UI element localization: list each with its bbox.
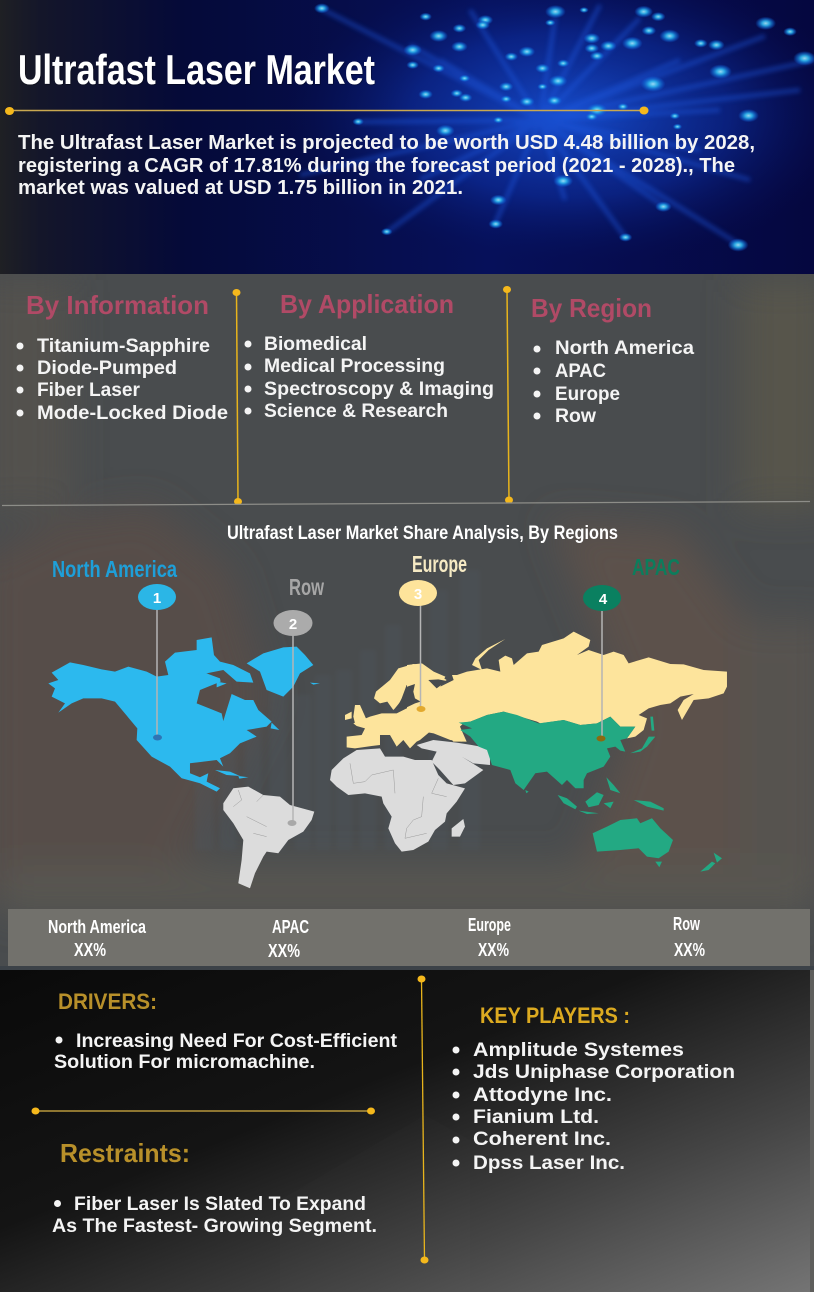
list: regions: Europe <box>555 383 620 405</box>
panel: by application <box>244 289 494 422</box>
share: europe <box>468 915 511 960</box>
list: key players: Jds Uniphase Corporation <box>473 1062 735 1083</box>
pin: row <box>274 574 324 826</box>
map: asia pacific <box>459 712 722 872</box>
pin: apac: APAC <box>632 554 680 580</box>
title: Ultrafast Laser Market <box>18 46 375 93</box>
list: key players: Dpss Laser Inc. <box>473 1153 625 1174</box>
pin: row: 2 <box>289 616 297 633</box>
heading: by application: By Application <box>280 289 454 319</box>
share: row <box>673 914 705 960</box>
pin: north america: 1 <box>153 590 161 607</box>
list: applications <box>244 333 494 422</box>
laser fibres <box>300 5 814 245</box>
list: applications: Science & Research <box>264 400 448 422</box>
heading: drivers: DRIVERS: <box>58 989 157 1014</box>
pin: apac <box>583 554 680 742</box>
heading: by information: By Information <box>26 290 209 320</box>
list: regions <box>534 337 694 427</box>
list: key players <box>452 1040 735 1174</box>
panel: by information <box>16 290 228 424</box>
pin: row: Row <box>289 574 324 600</box>
heading: key players: KEY PLAYERS : <box>480 1003 630 1028</box>
list: regions: North America <box>555 337 694 359</box>
panel: header laser background <box>0 0 814 274</box>
text: driver detail <box>54 1030 398 1073</box>
list: key players: Amplitude Systemes <box>473 1040 684 1061</box>
panel: regional share band <box>8 909 810 966</box>
map: south america <box>223 787 314 888</box>
panel: by region <box>531 293 694 427</box>
list: information types: Titanium-Sapphire <box>37 335 210 357</box>
share: europe: XX% <box>478 940 509 960</box>
share: apac: APAC <box>272 917 309 937</box>
pin: apac: 4 <box>599 591 608 608</box>
text: driver detail: Solution For micromachine. <box>54 1051 315 1073</box>
pin: europe <box>399 551 467 712</box>
list: applications: Biomedical <box>264 333 367 355</box>
pin: north america: North America <box>52 556 177 582</box>
divider: application and region <box>503 286 513 504</box>
share: north america: North America <box>48 917 147 937</box>
divider: left and key players <box>418 976 428 1264</box>
intro paragraph: registering a CAGR of 17.81% during the forecast period (2021 - 2028)., The <box>18 155 735 177</box>
panel: bottom dark section <box>0 966 814 1292</box>
share: europe: Europe <box>468 915 511 935</box>
intro paragraph: The Ultrafast Laser Market is projected to be worth USD 4.48 billion by 2028, <box>18 132 755 154</box>
list: information types: Fiber Laser <box>37 379 140 401</box>
list: key players: Coherent Inc. <box>473 1129 611 1150</box>
heading: market share analysis: Ultrafast Laser Market Share Analysis, By Regions <box>227 523 618 544</box>
map: europe and russia <box>345 632 727 748</box>
text: driver detail: Increasing Need For Cost-Efficient <box>76 1030 398 1052</box>
list: key players: Attodyne Inc. <box>473 1085 612 1106</box>
pin: europe: Europe <box>412 551 467 577</box>
text: restraint detail: Fiber Laser Is Slated To Expand <box>74 1193 366 1215</box>
list: key players: Fianium Ltd. <box>473 1107 599 1128</box>
share: apac: XX% <box>268 941 300 961</box>
world map <box>48 632 727 888</box>
list: regions: APAC <box>555 360 606 382</box>
share: apac <box>268 917 309 961</box>
list: regions: Row <box>555 405 597 427</box>
list: applications: Medical Processing <box>264 355 445 377</box>
map: africa and middle east <box>330 740 490 852</box>
share: row: Row <box>673 914 701 934</box>
panel: middle background <box>0 274 814 974</box>
heading: by region: By Region <box>531 293 652 323</box>
share: north america: XX% <box>74 940 106 960</box>
divider: information and application <box>232 289 242 505</box>
glowing fibre tips <box>314 3 814 252</box>
intro paragraph <box>18 132 755 199</box>
list: information types: Diode-Pumped <box>37 357 177 379</box>
heading: restraints: Restraints: <box>60 1138 190 1168</box>
divider: drivers and restraints <box>32 1108 375 1114</box>
pin: europe: 3 <box>414 586 422 603</box>
map: north america <box>48 637 320 792</box>
share: row: XX% <box>674 940 705 960</box>
header divider line <box>5 106 648 115</box>
list: information types: Mode-Locked Diode <box>37 402 228 424</box>
list: applications: Spectroscopy & Imaging <box>264 378 494 400</box>
text: restraint detail <box>52 1193 377 1237</box>
intro paragraph: market was valued at USD 1.75 billion in 2021. <box>18 177 463 199</box>
share: north america <box>48 917 147 960</box>
pin: north america <box>52 556 177 740</box>
list: information types <box>16 335 228 424</box>
text: restraint detail: As The Fastest- Growing Segment. <box>52 1215 377 1237</box>
